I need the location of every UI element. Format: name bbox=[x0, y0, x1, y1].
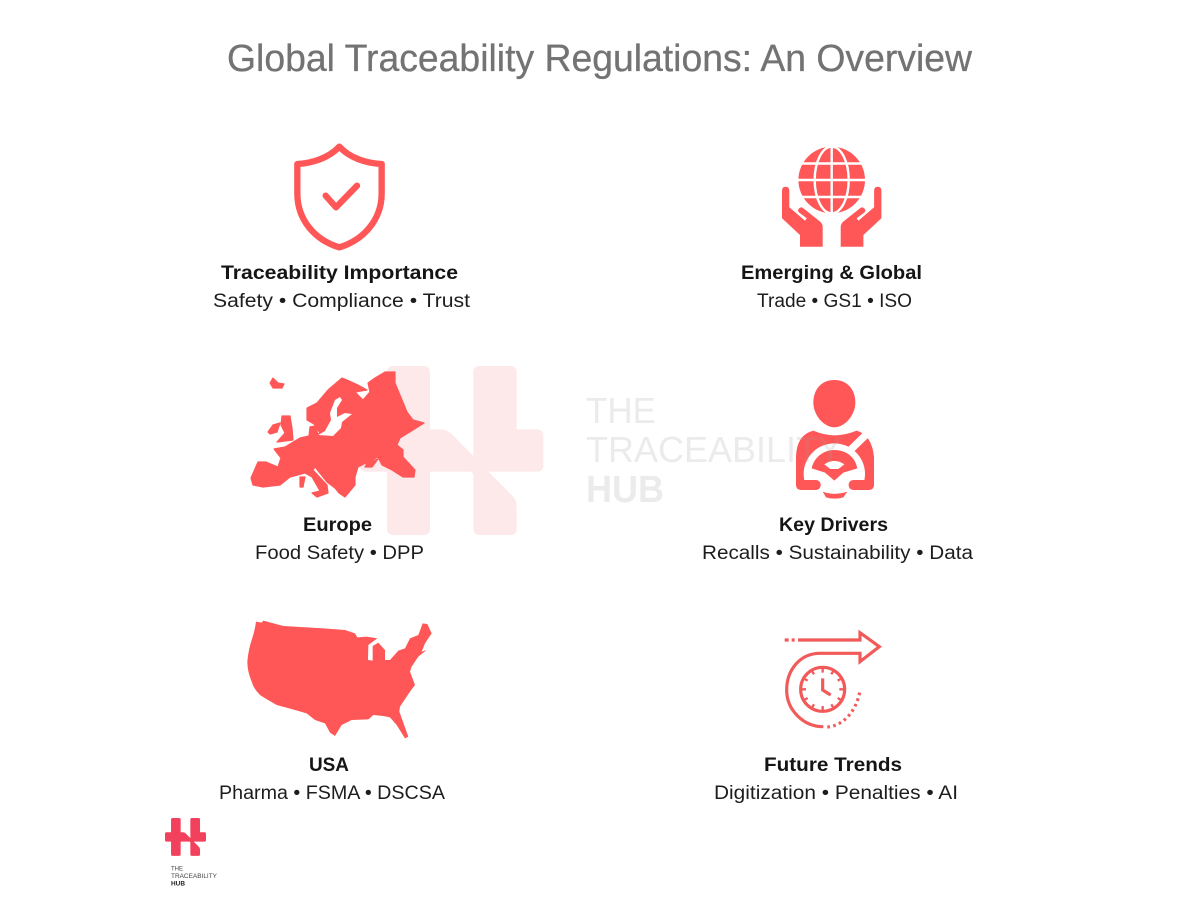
watermark: The Traceability Hub wordmark: HUB bbox=[586, 469, 664, 511]
icon: arrow around clock bbox=[785, 633, 879, 727]
text: Food Safety, DPP: Food Safety • DPP bbox=[255, 543, 424, 564]
logo: The Traceability Hub bbox=[165, 818, 217, 888]
text: Trade, GS1, ISO: Trade • GS1 • ISO bbox=[757, 291, 912, 312]
text: Safety, Compliance, Trust: Safety • Compliance • Trust bbox=[213, 291, 471, 312]
logo: The Traceability Hub: TRACEABILITY bbox=[171, 874, 217, 880]
text: Digitization, Penalties, AI: Digitization • Penalties • AI bbox=[714, 783, 958, 804]
icon: USA map bbox=[247, 621, 432, 738]
heading: Traceability Importance: Traceability Importance bbox=[221, 263, 458, 284]
heading: USA: USA bbox=[309, 755, 349, 776]
heading: Future Trends: Future Trends bbox=[764, 755, 902, 776]
logo: The Traceability Hub: THE bbox=[171, 866, 183, 872]
icon: driver at steering wheel bbox=[796, 380, 874, 505]
heading: Europe: Europe bbox=[303, 515, 372, 536]
watermark: The Traceability Hub wordmark: THE bbox=[586, 390, 656, 431]
heading: Emerging & Global: Emerging & Global bbox=[741, 263, 922, 284]
watermark: H logo mark bbox=[360, 366, 543, 535]
heading: Key Drivers: Key Drivers bbox=[779, 515, 888, 536]
logo: The Traceability Hub: HUB bbox=[171, 882, 186, 888]
icon: hands holding globe bbox=[782, 146, 881, 247]
icon: shield with check bbox=[297, 147, 382, 247]
text: Recalls, Sustainability, Data: Recalls • Sustainability • Data bbox=[702, 543, 973, 564]
watermark: The Traceability Hub wordmark bbox=[586, 390, 842, 511]
title: Global Traceability Regulations: An Overview bbox=[227, 38, 973, 80]
watermark: The Traceability Hub wordmark: TRACEABILITY bbox=[586, 429, 842, 470]
icon: Europe map bbox=[251, 372, 424, 497]
text: Pharma, FSMA, DSCSA: Pharma • FSMA • DSCSA bbox=[219, 783, 445, 804]
